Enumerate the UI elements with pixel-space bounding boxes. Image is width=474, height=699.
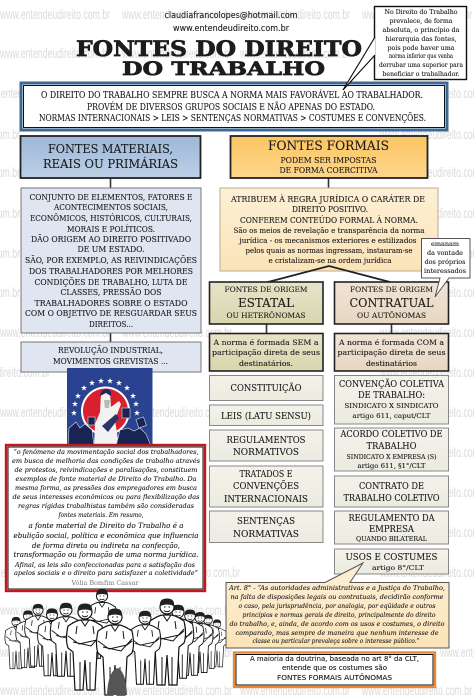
panel: fontes materiais description: CONDIÇÕES DE TRABALHO, LUTA DE	[34, 276, 188, 288]
background watermark: www.entendeudireito.com.br	[0, 45, 110, 61]
callout: hierarchy note	[343, 6, 466, 90]
item: regulamento da empresa: REGULAMENTO DA	[348, 514, 435, 524]
panel: fontes contratual: OU AUTÔNOMAS	[357, 311, 426, 320]
panel: fontes materiais description: DÃO ORIGEM AO DIREITO POSITIVADO	[31, 233, 191, 245]
panel: main principle	[21, 83, 447, 130]
contact lines: www.entendeudireito.com.br	[173, 24, 289, 34]
heading: fontes formais: FONTES FORMAIS	[268, 139, 389, 154]
contact lines	[164, 11, 298, 34]
callout: artigo 8: o caso, pela jurisprudência, por analogia, por eqüidade e outros	[238, 602, 436, 610]
panel: fontes contratual: CONTRATUAL	[350, 296, 434, 310]
panel: fontes materiais description: CLASSES, PRESSÃO DOS	[60, 286, 162, 298]
item: tratados: TRATADOS E	[240, 469, 293, 480]
item: leis	[210, 405, 323, 426]
item: leis: LEIS (LATU SENSU)	[221, 411, 311, 422]
panel: main principle: PROVÉM DE DIVERSOS GRUPOS SOCIAIS E NÃO APENAS DO ESTADO.	[87, 101, 375, 113]
panel: fontes formais description: pelos quais as normas ingressam, instauram-se	[246, 247, 412, 255]
callout: artigo 8: na falta de disposições legais ou contratuais, decidirão conforme	[230, 593, 444, 601]
panel: doctrine quote: “o fenômeno da movimentação social dos trabalhadores,	[14, 448, 198, 456]
heading: fontes materiais	[20, 136, 200, 178]
panel: norma sem participação: A norma é formada SEM a	[212, 338, 319, 347]
panel: fontes contratual	[334, 282, 448, 324]
item: regulamento da empresa	[334, 511, 448, 544]
callout: hierarchy note: norma inferior que venha	[389, 53, 453, 60]
item: acordo coletivo: TRABALHO	[366, 442, 416, 452]
heading: fontes formais	[230, 136, 428, 178]
item: usos e costumes: artigo 8°/CLT	[372, 564, 425, 572]
item: convenção coletiva: SINDICATO X SINDICATO	[344, 402, 439, 410]
panel: doctrine quote: exemplos de fonte material de Direito do Trabalho. Da	[16, 475, 196, 483]
panel: fontes materiais description: DE UM ESTADO.	[78, 245, 144, 255]
panel: doctrine quote: de protestos, reivindicações e paralisações, constituem	[14, 466, 198, 474]
background watermark: www.entendeudireito.com.br	[0, 602, 110, 618]
background watermark: www.entendeudireito.com.br	[121, 644, 232, 660]
panel: doctrine quote: apelos sociais e o direito para satisfazer a coletividade”	[14, 569, 198, 577]
panel: fontes formais description	[220, 188, 438, 271]
panel: majority doctrine: entende que os costumes são	[282, 664, 387, 672]
panel: fontes materiais description: TRABALHADORES SOBRE O ESTADO	[34, 299, 188, 309]
panel: fontes estatal: OU HETERÔNOMAS	[226, 311, 306, 320]
panel: fontes materiais description: SÃO, POR EXEMPLO, AS REIVINDICAÇÕES	[25, 254, 197, 266]
item: usos e costumes	[334, 549, 448, 574]
item: constituição: CONSTITUIÇÃO	[230, 382, 302, 394]
panel: fontes estatal: FONTES DE ORIGEM	[224, 285, 308, 294]
panel: fontes formais description: São os meios de revelação e transparência da norma	[234, 227, 424, 235]
item: contrato coletivo: TRABALHO COLETIVO	[344, 494, 440, 504]
item: tratados: CONVENÇÕES	[233, 480, 299, 492]
background watermark: www.entendeudireito.com.br	[129, 564, 240, 580]
item: regulamentos normativos: NORMATIVOS	[233, 447, 299, 458]
callout: emanam: emanam	[431, 241, 459, 248]
title	[76, 36, 362, 80]
panel: doctrine quote: transformação ou formação de uma norma jurídica.	[14, 550, 198, 559]
panel: norma com participação: destinatários	[366, 359, 417, 368]
background watermark: www.entendeudireito.com.br	[0, 404, 110, 420]
panel: norma sem participação: participação direta de seus	[212, 348, 320, 357]
callout: hierarchy note: absoluta, o princípio da	[382, 27, 460, 34]
item: regulamento da empresa: QUANDO BILATERAL	[356, 535, 428, 543]
item: acordo coletivo	[334, 428, 448, 471]
background watermark: www.entendeudireito.com.br	[0, 324, 110, 340]
callout: emanam: da vontade	[427, 250, 463, 257]
callout: emanam	[422, 238, 470, 297]
item: sentenças: NORMATIVAS	[233, 529, 299, 540]
heading: fontes formais: DE FORMA COERCITIVA	[280, 166, 378, 176]
item: regulamentos normativos: REGULAMENTOS	[226, 435, 306, 446]
callout: emanam: dos próprios	[424, 259, 466, 266]
item: regulamentos normativos	[210, 430, 323, 461]
panel: revolução industrial	[21, 342, 201, 372]
item: acordo coletivo: ACORDO COLETIVO DE	[340, 430, 442, 440]
item: sentenças	[210, 511, 323, 542]
panel: norma com participação: A norma é formada COM a	[338, 338, 445, 347]
panel: norma sem participação: destinatários.	[239, 359, 293, 368]
panel: doctrine quote: de forma direta ou indireta na confecção,	[32, 541, 180, 550]
item: regulamento da empresa: EMPRESA	[369, 525, 414, 535]
background watermark: www.entendeudireito.com.br	[239, 682, 350, 698]
item: convenção coletiva	[334, 376, 448, 424]
panel: fontes materiais description: MORAIS E POLÍTICOS.	[67, 223, 155, 235]
background watermark: www.entendeudireito.com.br	[121, 682, 232, 698]
panel: doctrine quote: Afinal, as leis são confeccionadas para a satisfação dos	[14, 561, 195, 569]
callout: artigo 8: princípios e normas gerais de direito, principalmente do direito	[242, 611, 436, 619]
panel: fontes formais description: ATRIBUEM À REGRA JURÍDICA O CARÁTER DE	[230, 193, 425, 205]
item: convenção coletiva: artigo 611, caput/CLT	[352, 412, 431, 420]
heading: fontes formais: PODEM SER IMPOSTAS	[280, 156, 377, 166]
panel: norma sem participação	[210, 334, 323, 371]
background watermark: www.entendeudireito.com.br	[239, 45, 350, 61]
background watermark: www.entendeudireito.com.br	[0, 644, 110, 660]
panel: fontes materiais description	[21, 188, 201, 333]
background watermark: www.entendeudireito.com.br	[239, 6, 350, 22]
panel: fontes contratual: FONTES DE ORIGEM	[350, 285, 433, 294]
panel: fontes materiais description: ECONÔMICOS, HISTÓRICOS, CULTURAIS,	[30, 212, 192, 224]
connectors	[110, 178, 392, 342]
item: convenção coletiva: CONVENÇÃO COLETIVA	[339, 378, 444, 390]
panel: main principle: O DIREITO DO TRABALHO SEMPRE BUSCA A NORMA MAIS FAVORÁVEL AO TRABALHADOR.	[41, 89, 423, 101]
panel: majority doctrine	[234, 652, 435, 687]
item: tratados	[210, 466, 323, 507]
panel: fontes materiais description: DOS TRABALHADORES POR MELHORES	[29, 267, 193, 277]
callout: emanam: interessados	[424, 268, 466, 275]
arrow: split to estatal and contratual	[268, 266, 390, 282]
callout: hierarchy note: prevalece, de forma	[390, 18, 453, 25]
item: usos e costumes: USOS E COSTUMES	[346, 553, 438, 563]
panel: doctrine quote: de seus interesses econômicos ou para flexibilização das	[12, 493, 200, 501]
item: acordo coletivo: SINDICATO X EMPRESA (S)	[346, 453, 437, 461]
heading: fontes materiais: REAIS OU PRIMÁRIAS	[43, 156, 178, 171]
item: tratados: INTERNACIONAIS	[224, 494, 308, 505]
callout: hierarchy note: pois pode haver uma	[388, 45, 455, 52]
callout: hierarchy note: derrubar uma superior para	[379, 62, 463, 69]
panel: majority doctrine: A maioria da doutrina, baseada no art 8° da CLT,	[250, 655, 419, 663]
item: constituição	[210, 376, 323, 400]
panel: fontes materiais description: ACONTECIMENTOS SOCIAIS,	[53, 203, 168, 213]
title: DO TRABALHO	[122, 58, 325, 80]
item: sentenças: SENTENÇAS	[237, 516, 295, 527]
illustration: crowd of workers	[5, 589, 227, 695]
callout: hierarchy note: hierarquia das fontes,	[386, 36, 456, 43]
background watermark: www.entendeudireito.com.br	[121, 602, 232, 618]
callout: artigo 8: comparado, mas sempre de maneira que nenhum interesse de	[236, 629, 438, 637]
panel: norma com participação	[334, 334, 448, 371]
item: convenção coletiva: DE TRABALHO:	[358, 391, 425, 401]
panel: fontes formais description: e cristalizam-se na ordem jurídica	[268, 257, 392, 265]
panel: majority doctrine: FONTES FORMAIS AUTÔNOMAS	[277, 673, 392, 682]
panel: fontes formais description: CONFEREM CONTEÚDO FORMAL À NORMA.	[240, 214, 418, 226]
item: contrato coletivo	[334, 476, 448, 507]
callout: artigo 8	[226, 563, 449, 648]
panel: fontes materiais description: COM O OBJETIVO DE RESGUARDAR SEUS	[25, 309, 197, 319]
panel: fontes estatal	[210, 282, 323, 324]
background watermark: www.entendeudireito.com.br	[121, 324, 232, 340]
background watermark: www.entendeudireito.com.br	[121, 6, 232, 22]
callout: artigo 8: classe ou particular prevaleça sobre o interesse público.”	[252, 637, 420, 645]
panel: fontes formais description: DIREITO POSITIVO.	[292, 205, 368, 215]
panel: fontes materiais description: DIREITOS...	[89, 320, 133, 330]
panel: doctrine quote: em busca de melhoria das condições de trabalho através	[12, 457, 200, 465]
panel: doctrine quote: a fonte material de Direito do Trabalho é a	[28, 521, 184, 530]
heading: fontes materiais: FONTES MATERIAIS,	[48, 141, 173, 156]
background watermark: www.entendeudireito.com.br	[121, 404, 232, 420]
background watermark: www.entendeudireito.com.br	[0, 6, 110, 22]
panel: fontes materiais description: CONJUNTO DE ELEMENTOS, FATORES E	[30, 193, 192, 203]
callout: hierarchy note: No Direito do Trabalho	[384, 9, 458, 16]
panel: doctrine quote: mesma forma, as pressões dos empregadores em busca	[15, 484, 197, 492]
callout: artigo 8: do trabalho, e, ainda, de acordo com os usos e costumes, o direito	[230, 620, 444, 628]
panel: norma com participação: participação direta de seus	[338, 348, 446, 357]
background watermark: www.entendeudireito.com.br	[0, 682, 110, 698]
panel: doctrine quote: Vólia Bomfim Cassar	[71, 579, 139, 587]
background watermark: www.entendeudireito.com.br	[121, 45, 232, 61]
title: FONTES DO DIREITO	[76, 36, 362, 61]
panel: doctrine quote: ebulição social, política e econômica que influencia	[14, 531, 199, 540]
panel: fontes formais description: jurídica - os mecanismos exteriores e estilizados	[238, 237, 417, 245]
item: acordo coletivo: artigo 611, §1°/CLT	[358, 462, 426, 470]
panel: doctrine quote	[6, 445, 205, 591]
icon: workers poster	[67, 368, 152, 446]
item: contrato coletivo: CONTRATO DE	[359, 482, 424, 492]
panel: revolução industrial: MOVIMENTOS GREVISTAS ...	[53, 357, 168, 367]
callout: hierarchy note: beneficiar o trabalhador.	[382, 71, 460, 78]
panel: doctrine quote: fontes materiais. Em resumo,	[58, 511, 143, 519]
callout: artigo 8: Art. 8° - “As autoridades administrativas e a Justiça do Trabalho,	[228, 584, 445, 592]
panel: doctrine quote: regras rígidas trabalhistas também são consideradas	[18, 502, 194, 510]
panel: revolução industrial: REVOLUÇÃO INDUSTRIAL,	[58, 344, 163, 356]
panel: fontes estatal: ESTATAL	[238, 296, 294, 310]
contact lines: claudiafrancolopes@hotmail.com	[164, 11, 298, 21]
